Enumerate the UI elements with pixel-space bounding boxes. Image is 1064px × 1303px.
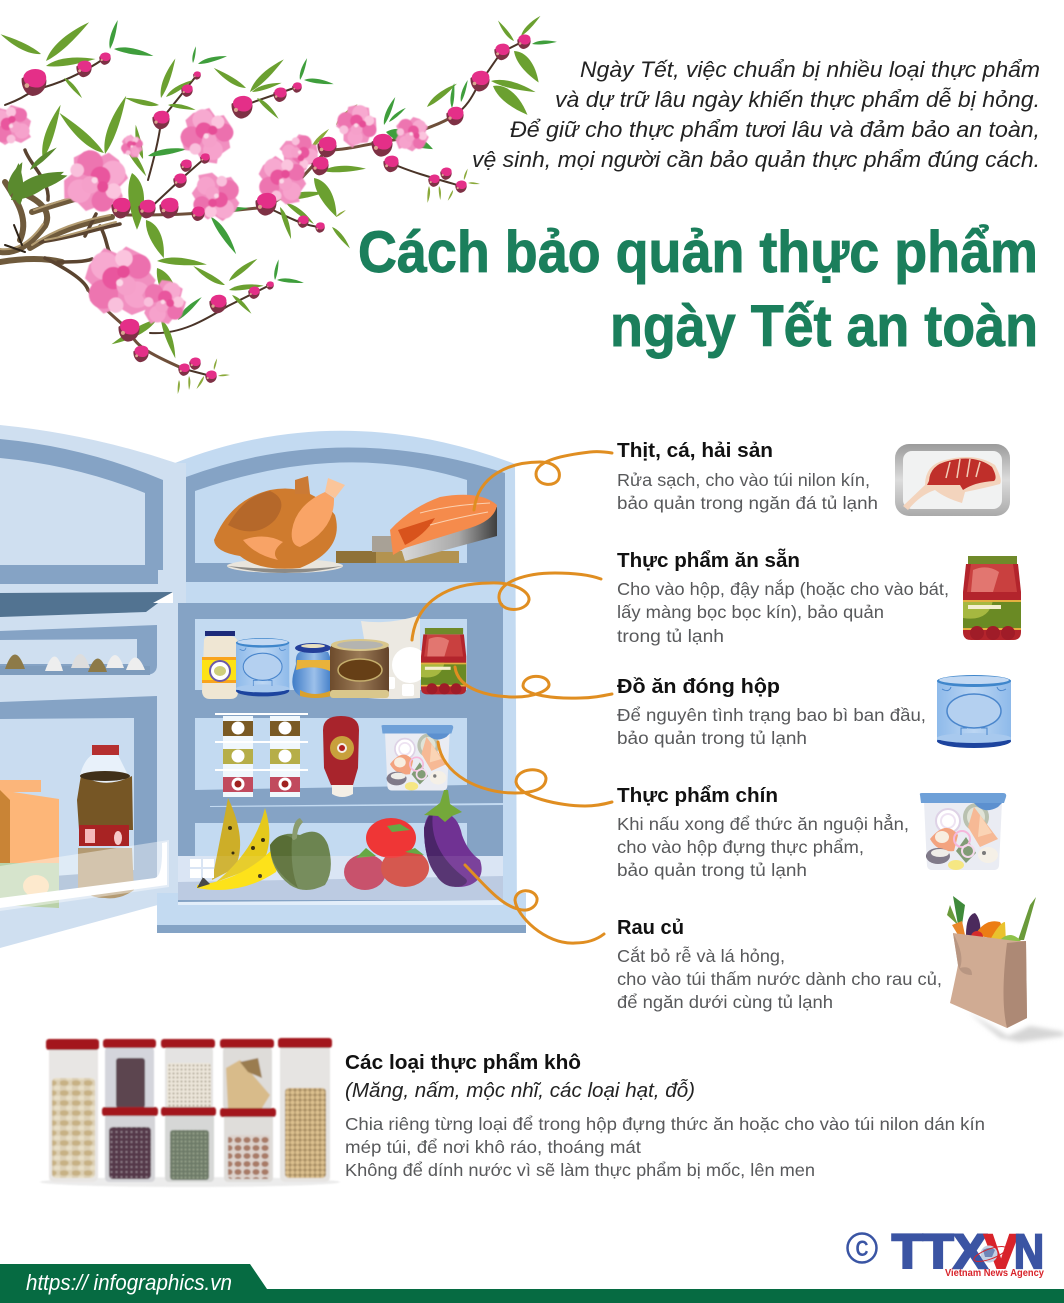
- open refrigerator illustration: [0, 425, 526, 948]
- item: ready-to-eat food: [617, 548, 949, 646]
- leaves: [0, 14, 557, 394]
- item: dry food: Chia riêng từng loại để trong hộp đựng thức ăn hoặc cho vào túi nilon dán kín: [345, 1114, 985, 1134]
- item: dry food: mép túi, để nơi khô ráo, thoáng mát: [345, 1137, 641, 1157]
- TTXVN logo: N: [1014, 1226, 1044, 1279]
- item: canned food: Để nguyên tình trạng bao bì ban đầu,: [617, 705, 926, 725]
- tall jar: soybeans: [278, 1038, 332, 1182]
- food: green pepper: [270, 818, 331, 890]
- item: ready-to-eat food: lấy màng bọc bọc kín), bảo quản: [617, 602, 884, 622]
- bottle: [77, 745, 134, 898]
- item: meat, fish, seafood: [617, 439, 878, 513]
- food: salmon steak: [336, 495, 497, 563]
- jar: bamboo shoots: [220, 1039, 274, 1109]
- intro text: Ngày Tết, việc chuẩn bị nhiều loại thực phẩm: [580, 57, 1040, 82]
- item: dry food: Không để dính nước vì sẽ làm thực phẩm bị mốc, lên men: [345, 1160, 815, 1180]
- intro text: Để giữ cho thực phẩm tươi lâu và đảm bảo an toàn,: [510, 117, 1040, 142]
- crisper glass overlay: [178, 856, 503, 900]
- milk carton: [0, 780, 59, 908]
- food: eggplant: [424, 790, 482, 887]
- food: small jar: [292, 643, 332, 698]
- footer bar with website: [0, 1264, 1064, 1303]
- branches: [0, 41, 524, 376]
- food: bananas: [197, 798, 286, 890]
- jar: mung beans: [161, 1107, 216, 1182]
- jar: mushrooms: [103, 1039, 156, 1109]
- item: vegetables: để ngăn dưới cùng tủ lạnh: [617, 992, 833, 1012]
- dry food containers: [40, 1038, 340, 1187]
- jar: red beans: [102, 1107, 158, 1182]
- food: brown can: [330, 639, 389, 698]
- food: roast chicken: [214, 476, 345, 573]
- food: yogurt cups: [215, 713, 308, 797]
- item: cooked food: Khi nấu xong để thức ăn nguội hẳn,: [617, 813, 909, 834]
- crisper drawer: [178, 856, 503, 900]
- icon: pickle jar: [963, 556, 1021, 640]
- item: meat, fish, seafood: Rửa sạch, cho vào túi nilon kín,: [617, 470, 870, 490]
- food: tomatoes: [344, 818, 429, 890]
- item: cooked food: bảo quản trong tủ lạnh: [617, 860, 807, 880]
- food: blue tin: [236, 638, 289, 696]
- TTXVN logo: TTX: [892, 1226, 987, 1279]
- intro text: và dự trữ lâu ngày khiến thực phẩm dễ bị hỏng.: [555, 87, 1040, 112]
- item: cooked food: Thực phẩm chín: [617, 784, 778, 807]
- copyright symbol: C: [856, 1236, 869, 1261]
- item: cooked food: [617, 784, 909, 880]
- item: ready-to-eat food: Thực phẩm ăn sẵn: [617, 548, 800, 572]
- item: dry food: [345, 1051, 985, 1180]
- title: [358, 220, 1038, 359]
- eggs on door shelf: [5, 654, 145, 672]
- item: vegetables: Rau củ: [617, 916, 684, 939]
- item: meat, fish, seafood: bảo quản trong ngăn đá tủ lạnh: [617, 493, 878, 513]
- item: vegetables: cho vào túi thấm nước dành cho rau củ,: [617, 969, 942, 989]
- food: white sack: [361, 615, 428, 699]
- icon: food container: [920, 793, 1006, 870]
- tall jar: pistachios: [46, 1039, 99, 1182]
- TTXVN logo: [892, 1226, 1044, 1279]
- blossoms: [0, 98, 432, 324]
- flower buds: [22, 35, 531, 383]
- item: vegetables: Cắt bỏ rễ và lá hỏng,: [617, 945, 785, 966]
- item: cooked food: cho vào hộp đựng thực phẩm,: [617, 837, 864, 857]
- food: mayonnaise jar: [202, 631, 238, 699]
- icon: packaged meat tray: [895, 444, 1010, 516]
- orange connector lines: [412, 452, 612, 943]
- item: canned food: bảo quản trong tủ lạnh: [617, 728, 807, 748]
- food: pickle jar in fridge: [421, 628, 466, 694]
- lower compartments: [178, 603, 503, 905]
- food: food box in fridge: [381, 725, 453, 790]
- fridge body: [157, 431, 526, 933]
- title: ngày Tết an toàn: [610, 294, 1038, 359]
- item: vegetables: [617, 916, 942, 1012]
- TTXVN logo: V: [984, 1226, 1018, 1279]
- food: ketchup bottle: [323, 716, 359, 797]
- top compartment: [186, 447, 505, 582]
- intro text: vệ sinh, mọi người cần bảo quản thực phẩm đúng cách.: [472, 147, 1040, 172]
- jar: white grains: [161, 1039, 215, 1109]
- item: ready-to-eat food: trong tủ lạnh: [617, 626, 724, 646]
- copyright symbol: [848, 1234, 876, 1262]
- left door: [0, 425, 176, 948]
- item: canned food: Đồ ăn đóng hộp: [617, 675, 780, 698]
- TTXVN logo: Vietnam News Agency: [945, 1267, 1044, 1279]
- item: ready-to-eat food: Cho vào hộp, đậy nắp (hoặc cho vào bát,: [617, 578, 949, 599]
- footer bar with website: https:// infographics.vn: [26, 1270, 232, 1295]
- item: dry food: (Măng, nấm, mộc nhĩ, các loại hạt, đỗ): [345, 1079, 695, 1102]
- food: white ice cubes: [190, 859, 214, 878]
- door glass shelf: [0, 840, 169, 911]
- intro text: [472, 57, 1040, 172]
- icon: blue tin: [937, 675, 1011, 748]
- icon: grocery bag: [947, 896, 1064, 1042]
- item: canned food: [617, 675, 926, 748]
- item: meat, fish, seafood: Thịt, cá, hải sản: [617, 439, 773, 462]
- jar: peanuts: [220, 1108, 276, 1182]
- peach blossom branch: [0, 14, 557, 394]
- item: dry food: Các loại thực phẩm khô: [345, 1051, 581, 1074]
